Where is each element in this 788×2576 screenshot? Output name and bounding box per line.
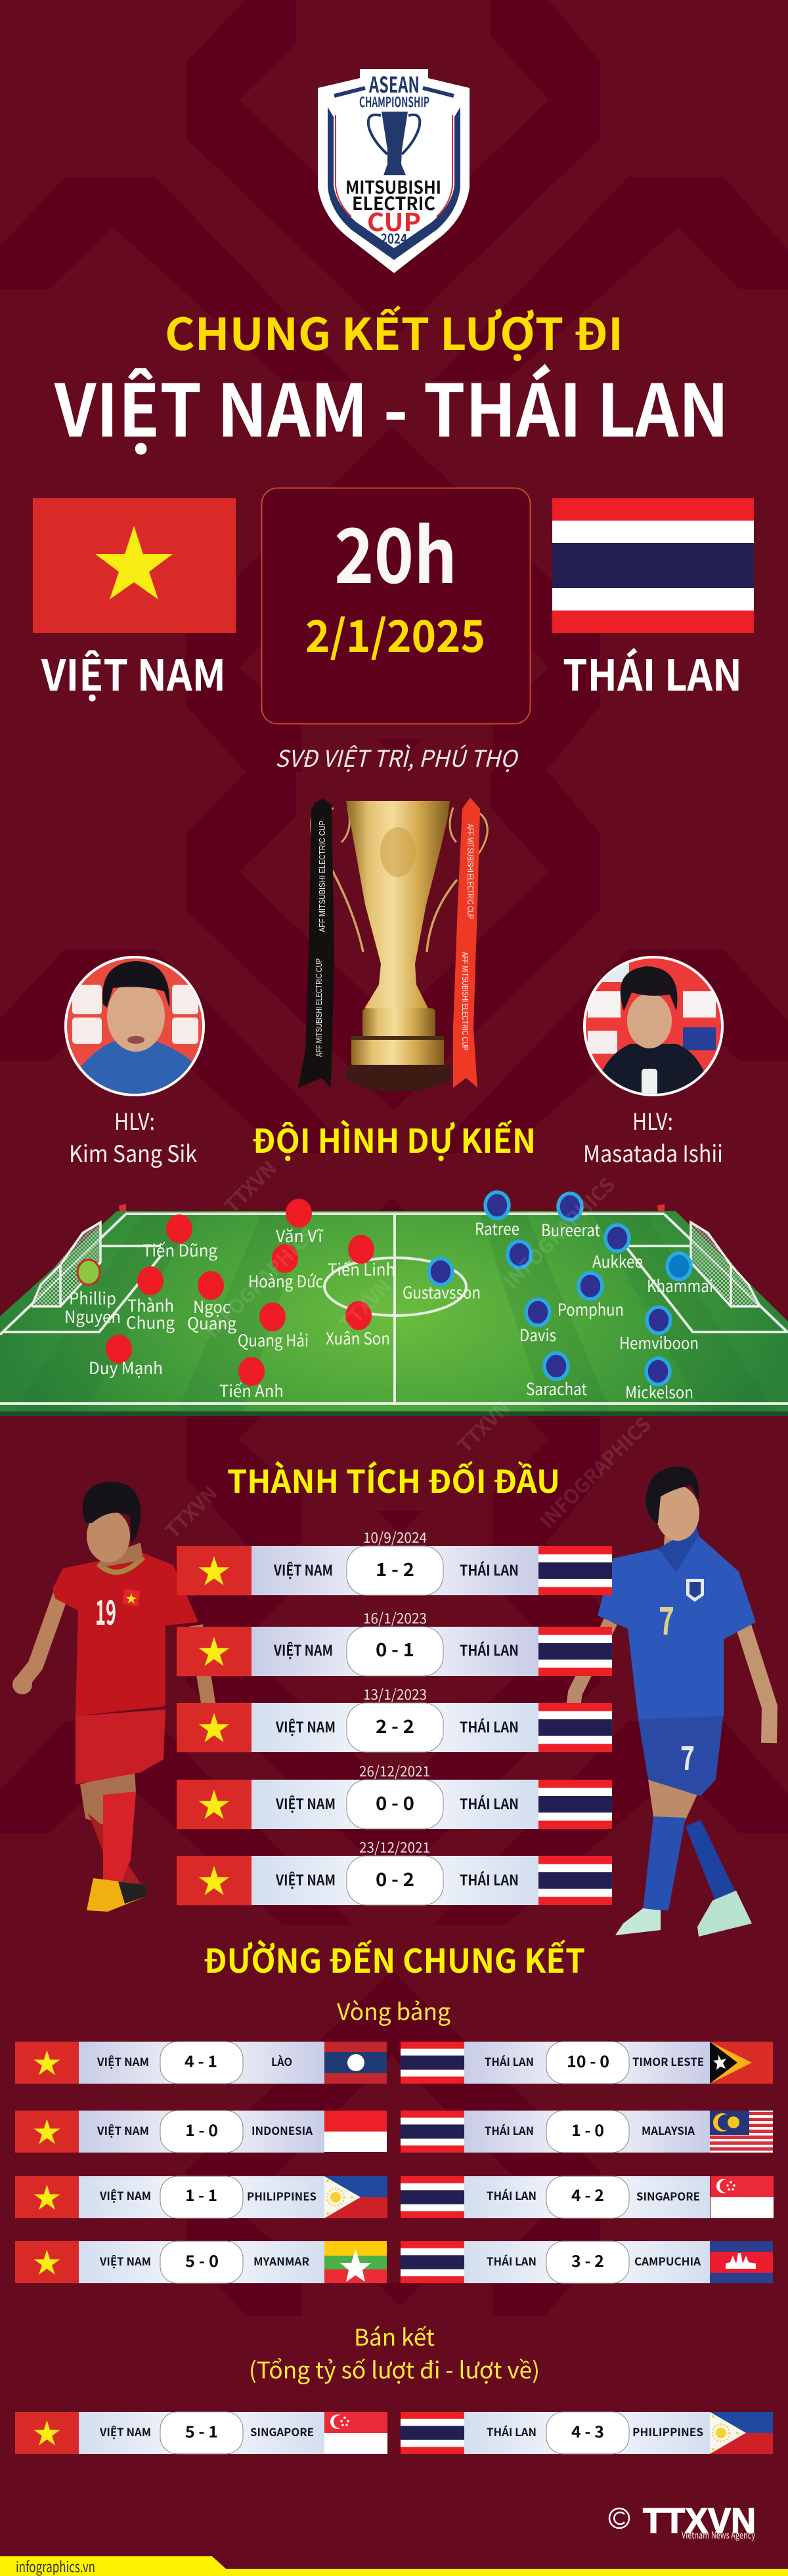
- subheading: Vòng bảng: Vòng bảng: [337, 1994, 450, 2027]
- lineup: Vietnam players: [64, 1199, 395, 1402]
- group match: Thái Lan - Timor Leste: THÁI LAN: [485, 2053, 534, 2069]
- head-to-head match 26/12/2021: 0 - 0: [376, 1790, 414, 1816]
- head-to-head match 13/1/2023: [177, 1683, 612, 1752]
- head-to-head match 23/12/2021: 0 - 2: [376, 1866, 414, 1892]
- lineup: Vietnam players: Quang Hải: [238, 1328, 309, 1352]
- lineup: Thailand players: Ratree: [475, 1216, 519, 1240]
- team label: Thái Lan: THÁI LAN: [563, 641, 742, 703]
- trophy with ribbons: AFF MITSUBISHI ELECTRIC CUP: [460, 952, 470, 1050]
- head-to-head match 10/9/2024: [177, 1526, 612, 1595]
- coach label: Masatada Ishii: Masatada Ishii: [583, 1136, 723, 1169]
- group match: Thái Lan - Campuchia: [401, 2241, 773, 2283]
- group match: Việt Nam - Lào: [15, 2042, 387, 2084]
- logo: ASEAN Mitsubishi Electric Cup 2024: 2024: [381, 228, 407, 248]
- player: Vietnam number 19: [12, 1482, 209, 1912]
- lineup: Thailand players: Pomphun: [558, 1297, 624, 1321]
- group match: Thái Lan - Campuchia: THÁI LAN: [487, 2252, 536, 2269]
- lineup: Thailand players: Bureerat: [541, 1218, 600, 1241]
- coach label: Kim Sang Sik: [69, 1104, 197, 1169]
- group match: Thái Lan - Singapore: SINGAPORE: [636, 2187, 700, 2204]
- trophy with ribbons: AFF MITSUBISHI ELECTRIC CUP: [314, 958, 324, 1057]
- head-to-head match 16/1/2023: 16/1/2023: [363, 1607, 427, 1628]
- group match: Việt Nam - Indonesia: [15, 2111, 387, 2153]
- head-to-head match 13/1/2023: 2 - 2: [376, 1713, 414, 1739]
- footer band with source: [0, 2556, 788, 2576]
- trophy with ribbons: AFF MITSUBISHI ELECTRIC CUP: [466, 824, 475, 919]
- group match: Thái Lan - Malaysia: 1 - 0: [571, 2118, 604, 2141]
- group match: Việt Nam - Indonesia: VIỆT NAM: [97, 2122, 149, 2138]
- group match: Việt Nam - Myanmar: 5 - 0: [185, 2248, 219, 2271]
- semifinal: Việt Nam - Singapore: VIỆT NAM: [99, 2423, 151, 2439]
- group match: Thái Lan - Singapore: 4 - 2: [571, 2183, 604, 2206]
- group match: Việt Nam - Myanmar: VIỆT NAM: [99, 2252, 151, 2269]
- watermarks: INFOGRAPHICS: [197, 1219, 322, 1343]
- lineup: Thailand players: Mickelson: [625, 1380, 693, 1404]
- lineup: Vietnam players: Chung: [126, 1310, 175, 1334]
- subheading: Bán kết: (Tổng tỷ số lượt đi - lượt về): [249, 2352, 540, 2386]
- subheading: Bán kết: [249, 2319, 540, 2386]
- watermarks: INFOGRAPHICS: [496, 1170, 621, 1294]
- head-to-head match 10/9/2024: 1 - 2: [376, 1556, 414, 1582]
- lineup: Vietnam players: Văn Vĩ: [276, 1224, 324, 1247]
- head-to-head match 23/12/2021: 23/12/2021: [359, 1836, 430, 1857]
- lineup: Thailand players: Aukkee: [592, 1249, 643, 1273]
- subheading: Bán kết: Bán kết: [354, 2319, 435, 2353]
- player: Vietnam number 19: 19: [95, 1585, 116, 1635]
- logo: ASEAN Mitsubishi Electric Cup 2024: CUP: [367, 202, 421, 238]
- head-to-head match 26/12/2021: 26/12/2021: [359, 1760, 430, 1781]
- semifinal: Thái Lan - Philippines: THÁI LAN: [487, 2423, 536, 2439]
- heading: Thành tích đối đầu: THÀNH TÍCH ĐỐI ĐẦU: [227, 1456, 560, 1502]
- goal: left: [32, 1222, 100, 1306]
- heading: Đường đến chung kết: ĐƯỜNG ĐẾN CHUNG KẾT: [204, 1935, 585, 1983]
- panel: Vietnam flag: [33, 498, 236, 633]
- head-to-head match 10/9/2024: THÁI LAN: [460, 1559, 519, 1580]
- group match: Việt Nam - Lào: 4 - 1: [185, 2049, 217, 2072]
- corner flags: [119, 1204, 665, 1211]
- venue text: SVĐ VIỆT TRÌ, PHÚ THỌ: [275, 741, 519, 774]
- coach label: Masatada Ishii: HLV:: [632, 1104, 673, 1137]
- watermarks: [158, 1153, 657, 1543]
- group match: Việt Nam - Indonesia: INDONESIA: [252, 2122, 313, 2138]
- panel: Thailand flag: [552, 498, 754, 633]
- credit: TTXVN logo: Vietnam News Agency: [682, 2528, 755, 2542]
- group match: Thái Lan - Timor Leste: [401, 2042, 773, 2084]
- watermarks: TTXVN: [332, 1272, 397, 1337]
- head-to-head match 10/9/2024: 10/9/2024: [363, 1526, 427, 1547]
- team label: Việt Nam: VIỆT NAM: [41, 641, 226, 703]
- panel: match time and date: 2/1/2025: [305, 601, 485, 665]
- logo: ASEAN Mitsubishi Electric Cup 2024: MITSUBISHI: [345, 173, 441, 199]
- goal: right: [691, 1222, 760, 1306]
- group match: Việt Nam - Indonesia: 1 - 0: [185, 2118, 218, 2141]
- watermarks: TTXVN: [217, 1153, 282, 1218]
- head-to-head match 16/1/2023: 0 - 1: [376, 1636, 414, 1662]
- group match: Thái Lan - Campuchia: CAMPUCHIA: [634, 2252, 701, 2269]
- group match: Thái Lan - Malaysia: THÁI LAN: [485, 2122, 534, 2138]
- group match: Việt Nam - Lào: VIỆT NAM: [97, 2053, 149, 2069]
- head-to-head match 23/12/2021: THÁI LAN: [460, 1869, 519, 1890]
- semifinal: Việt Nam - Singapore: SINGAPORE: [250, 2423, 314, 2439]
- head-to-head match 26/12/2021: VIỆT NAM: [275, 1793, 336, 1814]
- lineup: Thailand players: Davis: [519, 1323, 556, 1346]
- group match: Thái Lan - Singapore: [401, 2176, 774, 2218]
- lineup: Vietnam players: Nguyen: [64, 1304, 121, 1328]
- lineup: Thailand players: Gustavsson: [403, 1280, 481, 1304]
- semifinal: Việt Nam - Singapore: 5 - 1: [185, 2419, 218, 2442]
- logo: ASEAN Mitsubishi Electric Cup 2024: ELECTRIC: [352, 190, 435, 216]
- player: Thailand number 7: 7: [659, 1591, 674, 1646]
- lineup: Vietnam players: Phillip: [69, 1286, 116, 1310]
- group match: Việt Nam - Myanmar: MYANMAR: [253, 2252, 309, 2269]
- head-to-head match 23/12/2021: [177, 1836, 612, 1905]
- lineup: Vietnam players: Thành: [127, 1293, 174, 1317]
- group match: Việt Nam - Lào: LÀO: [271, 2053, 292, 2069]
- head-to-head match 13/1/2023: THÁI LAN: [460, 1716, 519, 1737]
- lineup: Vietnam players: Tiến Linh: [328, 1257, 395, 1281]
- heading: Đội hình dự kiến: ĐỘI HÌNH DỰ KIẾN: [252, 1115, 536, 1163]
- coach portrait: Kim Sang Sik: [64, 956, 205, 1103]
- watermarks: TTXVN: [450, 1393, 515, 1458]
- player: Thailand number 7: [573, 1467, 770, 1937]
- lineup: Vietnam players: Ngọc: [193, 1295, 230, 1318]
- title: VIỆT NAM - THÁI LAN: VIỆT NAM - THÁI LAN: [54, 353, 729, 458]
- watermarks: TTXVN: [158, 1478, 223, 1543]
- credit: TTXVN logo: TTXVN: [643, 2501, 756, 2541]
- coach portrait: Masatada Ishii: [583, 956, 724, 1096]
- semifinal: Thái Lan - Philippines: [401, 2412, 773, 2454]
- head-to-head match 10/9/2024: VIỆT NAM: [273, 1559, 333, 1580]
- semifinal: Thái Lan - Philippines: 4 - 3: [571, 2419, 604, 2442]
- lineup: Thailand players: Hemviboon: [619, 1331, 699, 1354]
- group match: Việt Nam - Philippines: VIỆT NAM: [99, 2187, 151, 2203]
- player: Thailand number 7: 7: [680, 1732, 695, 1780]
- group match: Thái Lan - Malaysia: MALAYSIA: [642, 2122, 695, 2138]
- group match: Thái Lan - Timor Leste: 10 - 0: [567, 2049, 609, 2072]
- lineup: Thailand players: Khammai: [647, 1274, 713, 1297]
- head-to-head match 23/12/2021: VIỆT NAM: [275, 1869, 336, 1890]
- head-to-head match 26/12/2021: THÁI LAN: [460, 1793, 519, 1814]
- trophy with ribbons: [298, 798, 487, 1091]
- logo: ASEAN Mitsubishi Electric Cup 2024: CHAMPIONSHIP: [359, 92, 429, 112]
- group match: Việt Nam - Philippines: [15, 2176, 387, 2218]
- lineup: Vietnam players: Duy Mạnh: [89, 1356, 163, 1379]
- semifinal: Thái Lan - Philippines: PHILIPPINES: [632, 2423, 703, 2439]
- group match: Thái Lan - Singapore: THÁI LAN: [487, 2187, 536, 2203]
- lineup: Vietnam players: Quang: [187, 1311, 236, 1335]
- trophy with ribbons: AFF MITSUBISHI ELECTRIC CUP: [317, 821, 327, 932]
- head-to-head match 16/1/2023: THÁI LAN: [460, 1639, 519, 1660]
- panel: match time and date: [261, 488, 531, 723]
- watermarks: INFOGRAPHICS: [532, 1409, 657, 1534]
- head-to-head match 13/1/2023: VIỆT NAM: [275, 1716, 336, 1737]
- logo: ASEAN Mitsubishi Electric Cup 2024: ASEAN: [368, 68, 420, 99]
- lineup: Vietnam players: Tiến Dũng: [142, 1238, 217, 1262]
- logo: ASEAN Mitsubishi Electric Cup 2024: [318, 68, 470, 273]
- lineup: Vietnam players: Hoàng Đức: [248, 1269, 323, 1293]
- lineup: Vietnam players: Tiến Anh: [219, 1379, 284, 1402]
- panel: match time and date: 20h: [334, 496, 457, 605]
- head-to-head match 13/1/2023: 13/1/2023: [363, 1683, 427, 1704]
- semifinal: Việt Nam - Singapore: [15, 2412, 387, 2454]
- group match: Thái Lan - Campuchia: 3 - 2: [571, 2248, 604, 2271]
- lineup: Thailand players: [403, 1192, 713, 1404]
- coach label: Kim Sang Sik: HLV:: [114, 1104, 155, 1137]
- group match: Việt Nam - Myanmar: [15, 2241, 387, 2283]
- group match: Thái Lan - Malaysia: [401, 2111, 773, 2153]
- head-to-head match 16/1/2023: [177, 1607, 612, 1676]
- football pitch: [0, 1204, 788, 1416]
- lineup: Vietnam players: Xuân Son: [326, 1326, 390, 1350]
- group match: Thái Lan - Timor Leste: TIMOR LESTE: [632, 2053, 704, 2069]
- coach label: Kim Sang Sik: Kim Sang Sik: [69, 1136, 197, 1169]
- group match: Việt Nam - Philippines: 1 - 1: [185, 2183, 217, 2206]
- title: CHUNG KẾT LƯỢT ĐI: CHUNG KẾT LƯỢT ĐI: [165, 299, 623, 363]
- group match: Việt Nam - Philippines: PHILIPPINES: [247, 2187, 317, 2204]
- coach label: Masatada Ishii: [583, 1104, 723, 1169]
- lineup: Thailand players: Sarachat: [526, 1377, 588, 1400]
- head-to-head match 16/1/2023: VIỆT NAM: [273, 1639, 333, 1660]
- head-to-head match 26/12/2021: [177, 1760, 612, 1829]
